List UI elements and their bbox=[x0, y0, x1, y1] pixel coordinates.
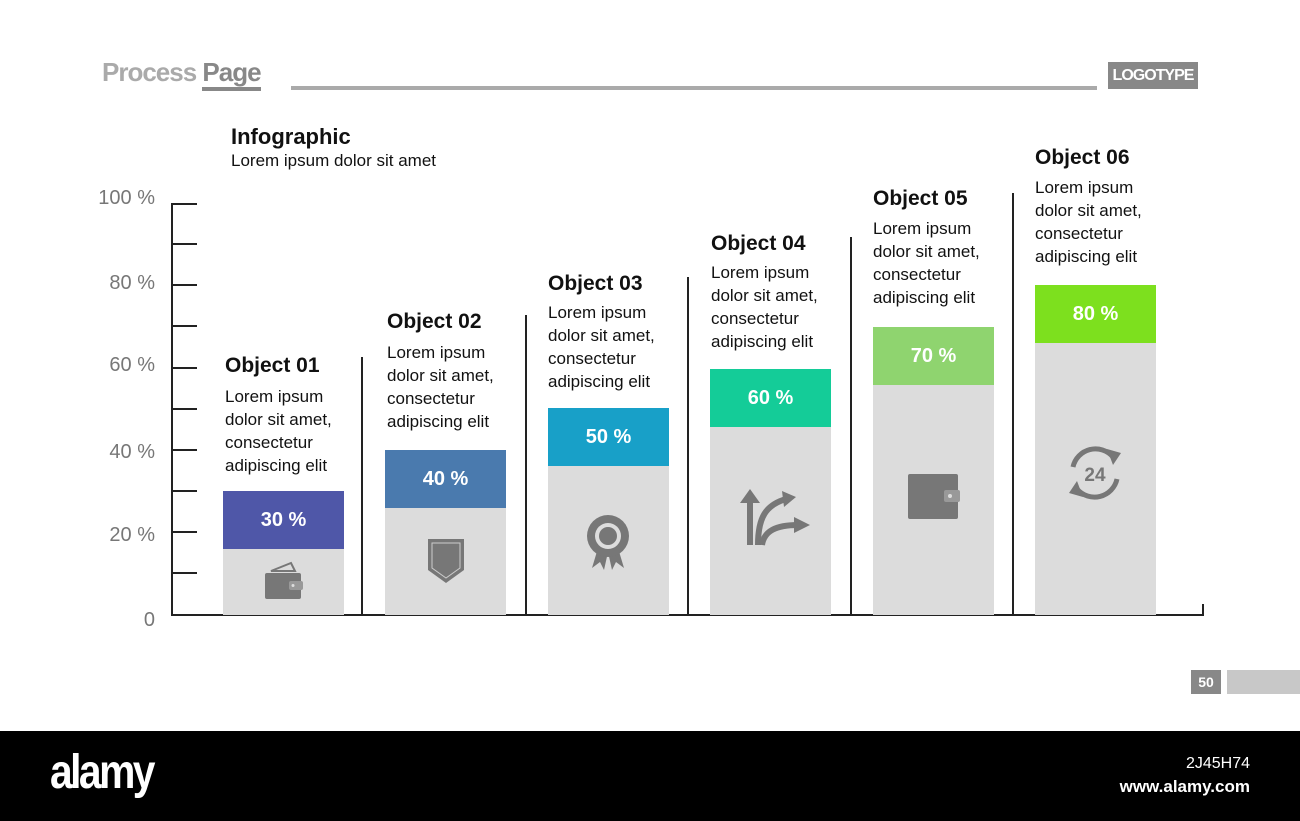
text: 0 bbox=[144, 609, 155, 631]
page number bbox=[1191, 670, 1221, 694]
object 06 text: Lorem ipsum bbox=[1035, 178, 1133, 197]
object 03 text: dolor sit amet, bbox=[548, 326, 655, 345]
object 04 text bbox=[711, 232, 818, 351]
icon: split arrows bbox=[740, 489, 810, 546]
bar 02: 40 % bbox=[423, 468, 468, 490]
infographic heading bbox=[231, 124, 436, 170]
object 04 text: dolor sit amet, bbox=[711, 286, 818, 305]
object 05 text: Lorem ipsum bbox=[873, 219, 971, 238]
footer band: www.alamy.com bbox=[1120, 777, 1250, 796]
object 02 text bbox=[387, 310, 494, 431]
separators bbox=[361, 357, 363, 615]
icon: wallet closed bbox=[908, 474, 960, 519]
object 02 text: dolor sit amet, bbox=[387, 366, 494, 385]
object 02 text: Object 02 bbox=[387, 310, 482, 333]
object 03 text: Lorem ipsum bbox=[548, 303, 646, 322]
bar 05: 70 % bbox=[911, 345, 956, 367]
object 04 text: Lorem ipsum bbox=[711, 263, 809, 282]
object 05 text bbox=[873, 187, 980, 307]
bar 01 bbox=[223, 491, 344, 615]
infographic heading: Lorem ipsum dolor sit amet bbox=[231, 151, 436, 170]
object 01 text: Lorem ipsum bbox=[225, 387, 323, 406]
logotype: LOGOTYPE bbox=[1113, 67, 1193, 84]
bar 06 bbox=[1035, 285, 1156, 615]
icon: award bbox=[587, 515, 629, 570]
footer band bbox=[0, 731, 1300, 821]
object 03 text: adipiscing elit bbox=[548, 372, 650, 391]
bar 02 bbox=[385, 450, 506, 615]
bar 03: 50 % bbox=[586, 426, 631, 448]
x axis baseline bbox=[171, 614, 1204, 616]
object 05 text: consectetur bbox=[873, 265, 961, 284]
object 06 text: dolor sit amet, bbox=[1035, 201, 1142, 220]
text: 20 % bbox=[109, 524, 155, 546]
icon: 24 hours: 24 bbox=[1084, 465, 1106, 486]
icon: shield bbox=[428, 539, 464, 583]
icon: 24 hours bbox=[1069, 446, 1121, 500]
title: process page: Process Page bbox=[102, 57, 261, 87]
object 01 text: consectetur bbox=[225, 433, 313, 452]
object 01 text: adipiscing elit bbox=[225, 456, 327, 475]
object 06 text bbox=[1035, 146, 1142, 266]
bar 04 bbox=[710, 369, 831, 615]
page number: 50 bbox=[1198, 674, 1214, 690]
footer band: alamy bbox=[50, 746, 153, 799]
bar 06: 80 % bbox=[1073, 303, 1118, 325]
infographic heading: Infographic bbox=[231, 124, 351, 149]
object 05 text: dolor sit amet, bbox=[873, 242, 980, 261]
object 04 text: Object 04 bbox=[711, 232, 806, 255]
bar 01: 30 % bbox=[261, 509, 306, 531]
icon: wallet bbox=[265, 562, 303, 599]
object 01 text: Object 01 bbox=[225, 354, 320, 377]
footer band: 2J45H74 bbox=[1186, 755, 1250, 772]
object 06 text: adipiscing elit bbox=[1035, 247, 1137, 266]
object 01 text: dolor sit amet, bbox=[225, 410, 332, 429]
object 03 text: consectetur bbox=[548, 349, 636, 368]
object 05 text: Object 05 bbox=[873, 187, 968, 210]
bar 05 bbox=[873, 327, 994, 615]
text: 60 % bbox=[109, 354, 155, 376]
logotype bbox=[1108, 62, 1198, 89]
object 02 text: adipiscing elit bbox=[387, 412, 489, 431]
object 04 text: adipiscing elit bbox=[711, 332, 813, 351]
y axis bbox=[171, 205, 173, 614]
bar 04: 60 % bbox=[748, 387, 793, 409]
text: 80 % bbox=[109, 272, 155, 294]
bar 03 bbox=[548, 408, 669, 615]
object 04 text: consectetur bbox=[711, 309, 799, 328]
text: 40 % bbox=[109, 441, 155, 463]
object 05 text: adipiscing elit bbox=[873, 288, 975, 307]
object 01 text bbox=[225, 354, 332, 475]
object 02 text: Lorem ipsum bbox=[387, 343, 485, 362]
object 03 text: Object 03 bbox=[548, 272, 643, 295]
y labels: 100 % bbox=[98, 187, 155, 209]
object 03 text bbox=[548, 272, 655, 391]
object 06 text: consectetur bbox=[1035, 224, 1123, 243]
object 02 text: consectetur bbox=[387, 389, 475, 408]
header rule bbox=[291, 86, 1097, 90]
object 06 text: Object 06 bbox=[1035, 146, 1130, 169]
